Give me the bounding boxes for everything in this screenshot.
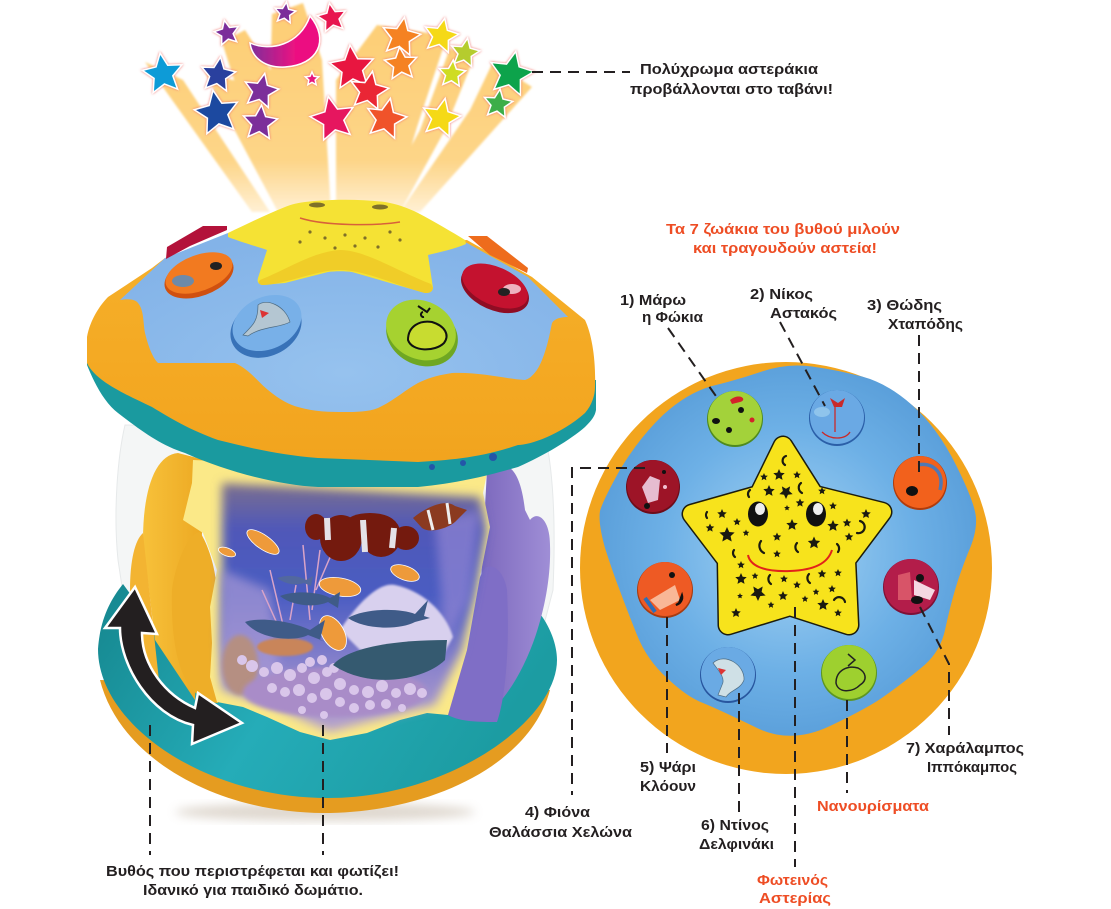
heading: seven animals: και τραγουδούν αστεία! — [693, 240, 877, 257]
cap blue top — [120, 215, 568, 412]
leader: base left — [149, 725, 151, 855]
leader: scene — [322, 725, 324, 855]
button lullaby — [821, 645, 877, 701]
product: top view, right — [580, 362, 992, 774]
button dolphin — [700, 647, 756, 703]
coral bed — [222, 635, 427, 719]
cap orange — [87, 240, 595, 462]
ground shadow — [175, 803, 475, 821]
smile — [748, 550, 832, 571]
button dolphin — [221, 284, 311, 369]
clownfish small — [413, 503, 467, 530]
label starfish: Φωτεινός — [757, 872, 828, 889]
rotation arrow — [105, 587, 242, 744]
product: rotating toy, left — [87, 200, 596, 821]
base orange — [100, 680, 550, 813]
top buttons — [158, 226, 536, 378]
label 3: Χταπόδης — [888, 316, 963, 333]
label 4 — [489, 804, 633, 841]
projected stars and moon — [140, 1, 537, 142]
leader: seahorse — [920, 607, 949, 735]
clownfish large — [305, 513, 419, 561]
label 7 — [906, 740, 1024, 776]
pink coral branches — [262, 545, 331, 630]
leader: starfish — [794, 607, 796, 867]
label 7: Ιππόκαμπος — [927, 759, 1017, 776]
label 6: Δελφινάκι — [699, 836, 774, 853]
label 5 — [640, 759, 696, 795]
leader: octopus — [918, 335, 920, 478]
light beams from the starfish — [145, 3, 532, 212]
purple coral — [448, 465, 550, 722]
text: ceiling stars caption: Πολύχρωμα αστεράκια — [640, 61, 819, 78]
stars — [140, 1, 537, 142]
button lobster — [809, 390, 865, 446]
star cut-outs — [706, 469, 871, 617]
button red — [454, 254, 536, 323]
label 2: 2) Νίκος — [750, 286, 813, 303]
glowing undersea scene — [183, 460, 490, 740]
label 5: 5) Ψάρι — [640, 759, 696, 776]
label lullaby: Νανουρίσματα — [817, 798, 930, 815]
leader: lullaby — [846, 700, 848, 793]
indicator dots — [429, 453, 497, 470]
orange disc — [580, 362, 992, 774]
label 1: 1) Μάρω — [620, 292, 686, 309]
label starfish: Αστερίας — [759, 890, 831, 907]
label 7: 7) Χαράλαμπος — [906, 740, 1024, 757]
label 2: Αστακός — [770, 305, 837, 322]
lavender left wash — [222, 570, 280, 680]
button seahorse — [883, 559, 939, 615]
button octopus — [893, 456, 947, 510]
leader: lobster — [780, 322, 825, 406]
label 4: Θαλάσσια Χελώνα — [489, 824, 633, 841]
top-view buttons — [626, 390, 947, 703]
label 1: η Φώκια — [642, 309, 704, 326]
leader: clownfish — [666, 617, 668, 753]
label 1 — [620, 292, 704, 326]
heading: seven animals: Τα 7 ζωάκια του βυθού μιλούν — [666, 221, 900, 238]
text: ceiling stars caption: προβάλλονται στο ταβάνι! — [630, 81, 833, 98]
label 3 — [867, 297, 963, 333]
text: ceiling stars caption — [630, 61, 833, 98]
grey fish shoal — [245, 576, 447, 680]
label 2 — [750, 286, 837, 322]
glass dome — [116, 425, 554, 640]
caption: base — [106, 863, 399, 899]
eyes — [748, 502, 826, 526]
leader: dolphin — [738, 693, 740, 812]
label 3: 3) Θώδης — [867, 297, 942, 314]
caption: base: Ιδανικό για παιδικό δωμάτιο. — [143, 882, 363, 899]
yellow coral — [130, 453, 218, 703]
button orange — [158, 244, 240, 307]
label 4: 4) Φιόνα — [525, 804, 591, 821]
moon — [250, 16, 320, 67]
white mound — [340, 585, 453, 660]
caption: base: Βυθός που περιστρέφεται και φωτίζει! — [106, 863, 399, 880]
button clownfish — [637, 562, 693, 618]
blue wavy top — [600, 365, 976, 736]
cap teal rim — [87, 355, 596, 487]
leader: seal — [668, 328, 718, 399]
starfish with star-shaped holes — [692, 446, 882, 625]
button red back-left — [166, 226, 227, 259]
label starfish — [757, 872, 831, 907]
button lullaby — [376, 289, 468, 378]
starfish body — [692, 446, 882, 625]
label 6 — [699, 817, 774, 853]
crescent cut-outs — [706, 456, 865, 602]
button turtle — [626, 460, 680, 514]
button orange back-right — [468, 236, 528, 273]
leader: ceiling stars — [532, 71, 630, 73]
right wash — [435, 510, 480, 640]
callout leaders — [150, 72, 949, 867]
label 5: Κλόουν — [640, 778, 696, 795]
button seal — [707, 391, 763, 447]
starfish top — [228, 200, 466, 293]
label 6: 6) Ντίνος — [701, 817, 769, 834]
leader: turtle — [572, 468, 645, 795]
small orange fish — [217, 525, 421, 655]
heading: seven animals — [666, 221, 900, 257]
base teal — [98, 584, 557, 798]
